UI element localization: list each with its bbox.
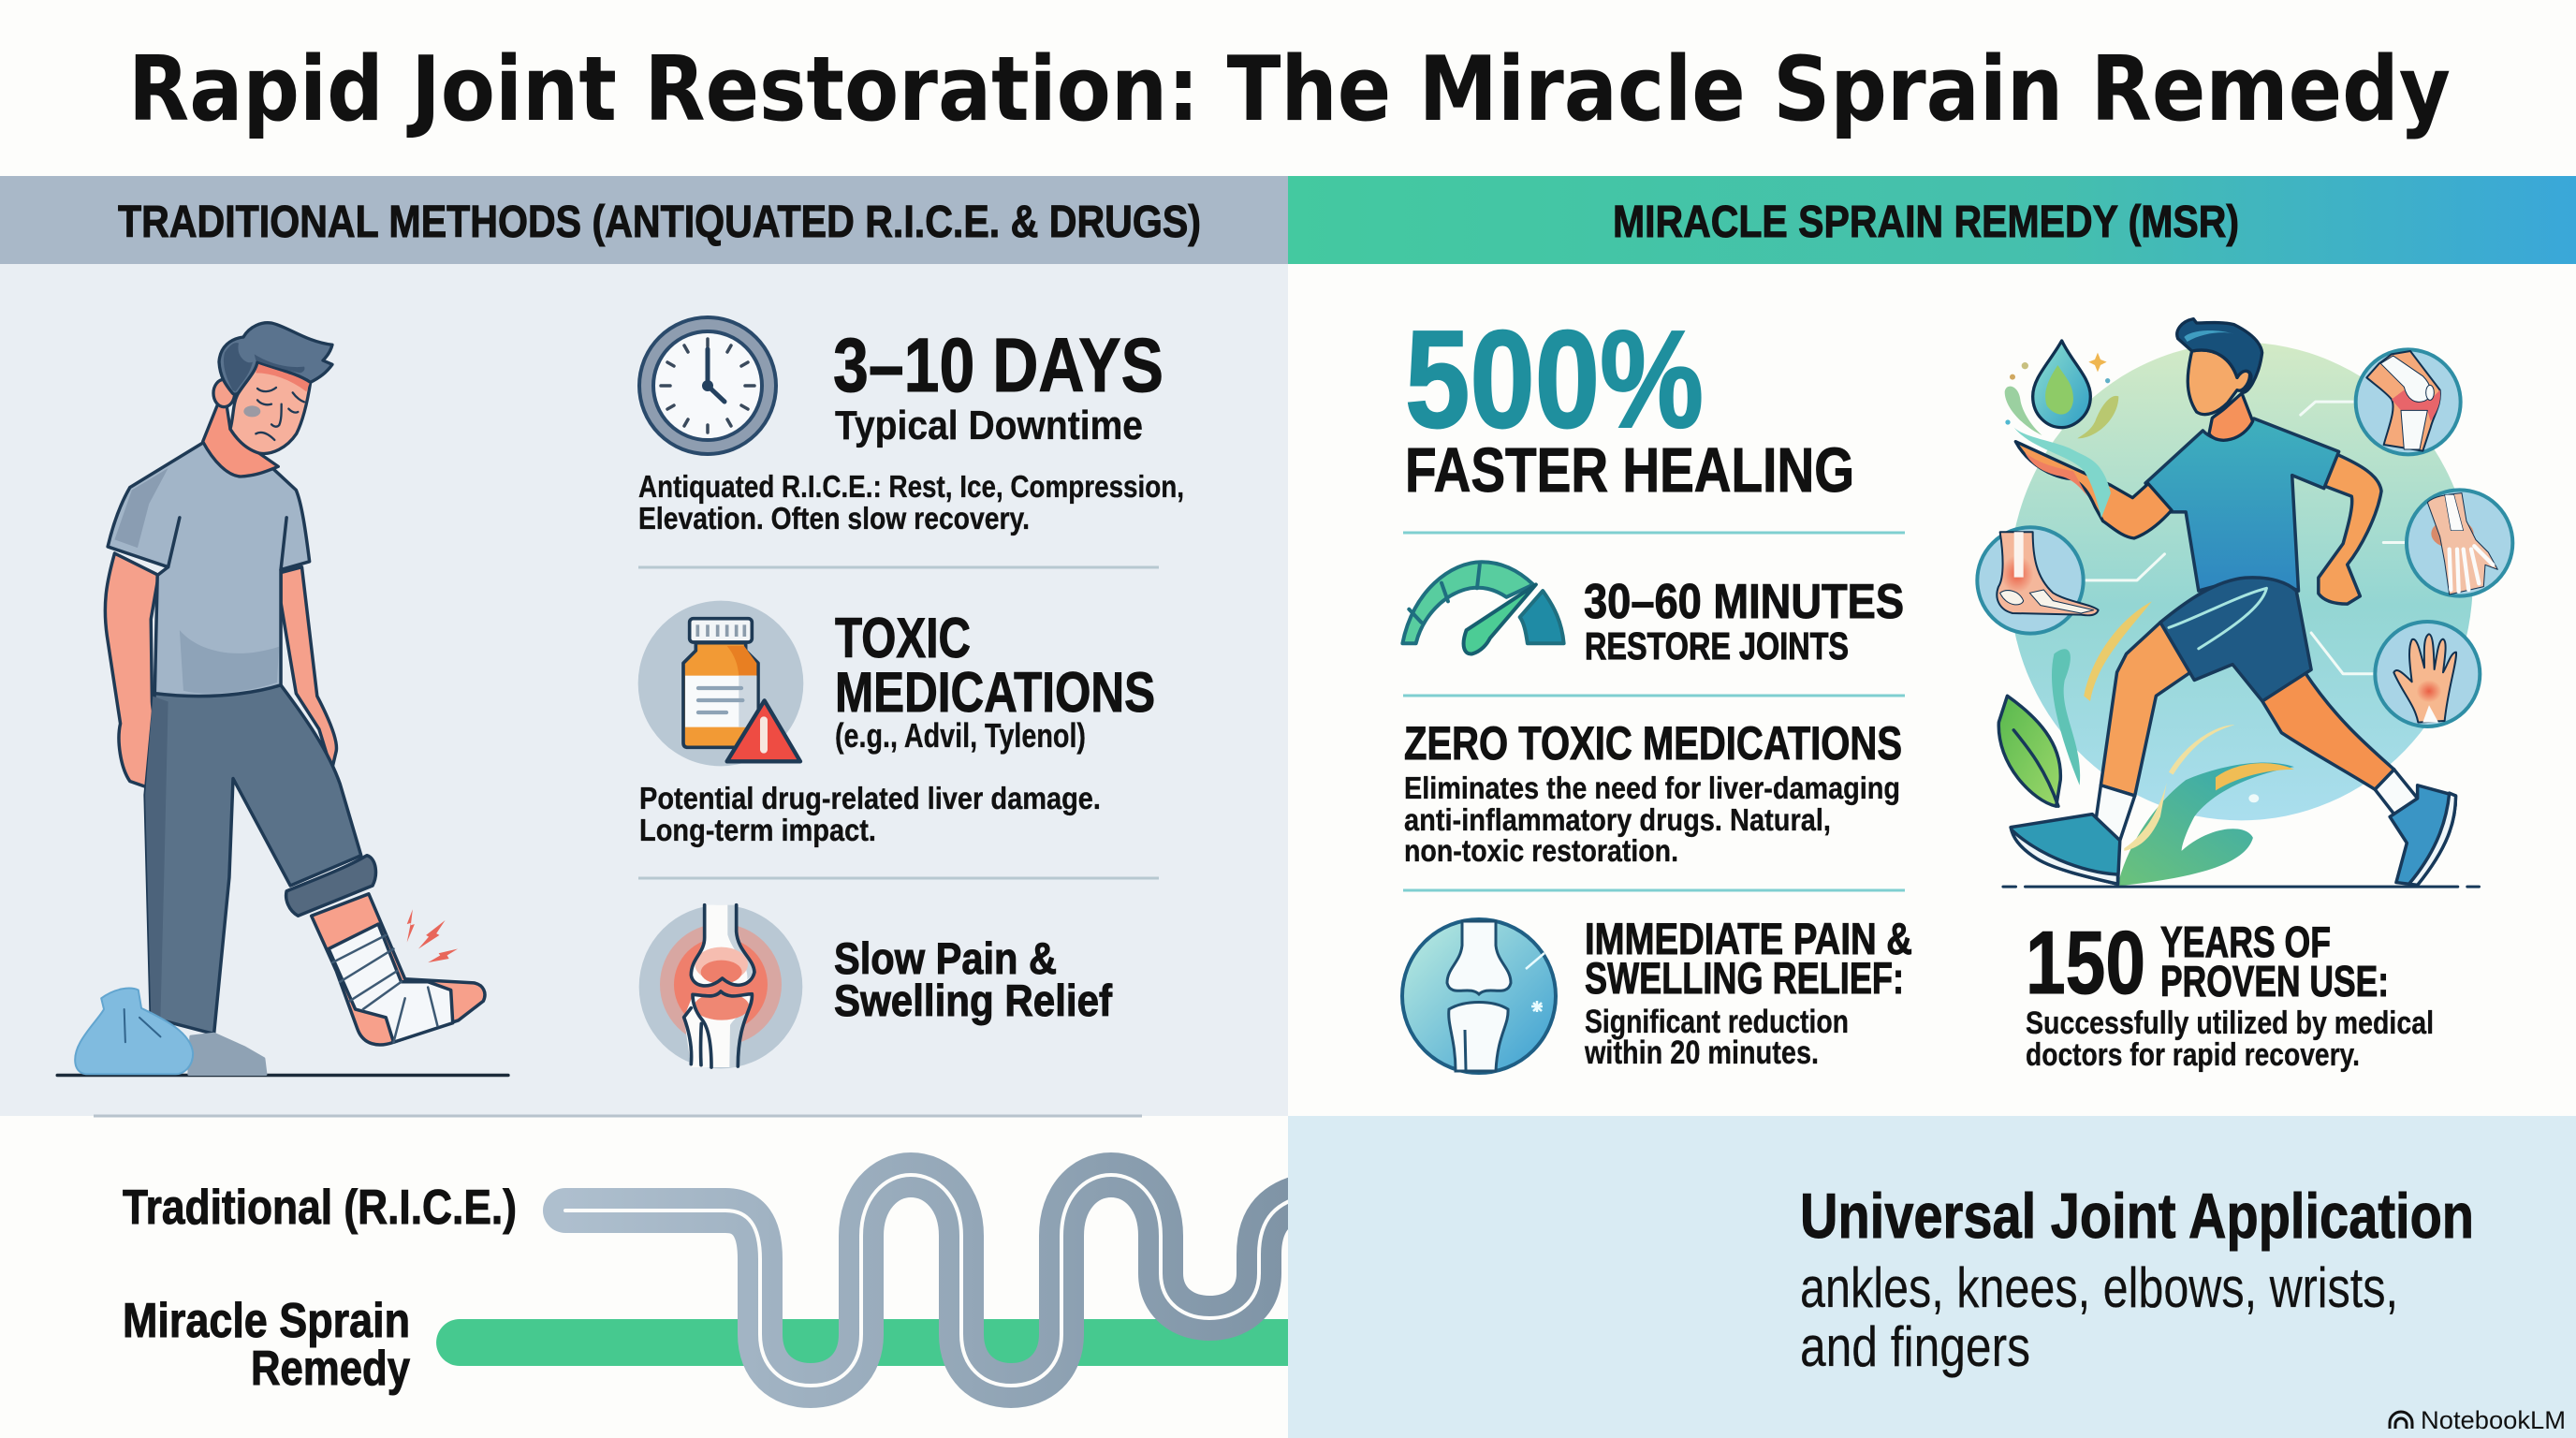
text block: slow pain relief xyxy=(834,933,1112,1025)
insets: knee, wrist and hand joints xyxy=(2356,349,2512,726)
text block: 150 years of proven use: doctors for rapid recovery. xyxy=(2026,1037,2360,1073)
text block: toxic medications: Potential drug-related liver damage. xyxy=(639,781,1101,815)
text block: 3-10 days: 3–10 DAYS xyxy=(833,323,1164,408)
text block: 150 years of proven use: Successfully utilized by medical xyxy=(2026,1005,2434,1041)
text block: zero toxic medications: Eliminates the need for liver-damaging xyxy=(1404,770,1900,805)
text block: immediate pain relief xyxy=(1584,914,1912,1071)
chart: recovery path comparison xyxy=(123,1175,1320,1396)
text block: 150 years of proven use: 150 xyxy=(2026,913,2145,1013)
text block: slow pain relief: Swelling Relief xyxy=(834,976,1112,1025)
icon: clock xyxy=(639,317,776,454)
text block: 150 years of proven use: YEARS OF xyxy=(2160,917,2331,966)
icon: medication bottle with warning xyxy=(638,601,803,766)
logo: NotebookLM: NotebookLM xyxy=(2421,1406,2566,1434)
text block: immediate pain relief: within 20 minutes. xyxy=(1584,1034,1819,1071)
illustration: injured man with bandaged ankle and ice bag xyxy=(57,323,508,1075)
text block: 3-10 days: Antiquated R.I.C.E.: Rest, Ice, Compression, xyxy=(638,469,1184,504)
panel: miracle sprain remedy xyxy=(1288,176,2576,1073)
text block: toxic medications: Long-term impact. xyxy=(639,813,876,847)
text block: toxic medications: MEDICATIONS xyxy=(835,661,1155,724)
icon: inflamed joint xyxy=(639,905,802,1068)
icon: speed gauge xyxy=(1402,562,1564,654)
inset: knee xyxy=(2356,349,2461,454)
icon: healed knee joint xyxy=(1402,919,1556,1073)
path: winding grey road xyxy=(543,1152,1288,1408)
label: miracle sprain remedy path: Miracle Sprain xyxy=(123,1294,410,1348)
panel: universal joint application: and fingers xyxy=(1800,1315,2030,1378)
text block: 150 years of proven use: PROVEN USE: xyxy=(2160,957,2389,1005)
bar: direct green path xyxy=(436,1319,1288,1366)
text block: immediate pain relief: IMMEDIATE PAIN & xyxy=(1585,914,1912,963)
text block: 30-60 minutes xyxy=(1584,575,1904,668)
text block: 30-60 minutes: 30–60 MINUTES xyxy=(1584,575,1904,629)
stat: 500% faster healing: 500% xyxy=(1405,302,1704,457)
illustration: runner with remedy drop and joint insets xyxy=(1977,319,2512,887)
inset: hand xyxy=(2375,622,2480,726)
panel: universal joint application: ankles, knees, elbows, wrists, xyxy=(1800,1256,2398,1319)
text block: toxic medications: (e.g., Advil, Tylenol) xyxy=(835,716,1086,755)
stat: 500% faster healing: FASTER HEALING xyxy=(1405,435,1854,506)
panel: traditional methods xyxy=(0,176,1288,1116)
text block: toxic medications: TOXIC xyxy=(835,607,971,669)
text block: immediate pain relief: SWELLING RELIEF: xyxy=(1585,953,1904,1003)
inset: ankle joint xyxy=(1977,527,2099,634)
text block: toxic medications xyxy=(639,607,1155,847)
traditional header xyxy=(0,176,1288,264)
text block: 3-10 days: Typical Downtime xyxy=(835,403,1143,448)
label: miracle sprain remedy path: Remedy xyxy=(251,1342,410,1396)
text block: slow pain relief: Slow Pain & xyxy=(834,933,1057,983)
man's head xyxy=(203,323,332,477)
text block: immediate pain relief: Significant reduction xyxy=(1585,1004,1849,1040)
inset: wrist xyxy=(2407,490,2512,596)
traditional header: TRADITIONAL METHODS (ANTIQUATED R.I.C.E. & DRUGS) xyxy=(118,198,1201,247)
stat: 500% faster healing xyxy=(1405,302,1854,506)
label: miracle sprain remedy path xyxy=(123,1294,410,1396)
label: traditional path: Traditional (R.I.C.E.) xyxy=(123,1181,517,1235)
remedy drop, hand and head xyxy=(2005,319,2262,538)
text block: 150 years of proven use xyxy=(2026,913,2434,1073)
text block: zero toxic medications xyxy=(1404,717,1902,868)
text block: zero toxic medications: ZERO TOXIC MEDICATIONS xyxy=(1404,717,1902,770)
text block: zero toxic medications: non-toxic restoration. xyxy=(1404,833,1678,868)
panel: universal joint application xyxy=(1288,1116,2576,1438)
text block: 30-60 minutes: RESTORE JOINTS xyxy=(1585,624,1849,668)
text block: 3-10 days: Elevation. Often slow recovery. xyxy=(638,501,1030,536)
msr header: MIRACLE SPRAIN REMEDY (MSR) xyxy=(1613,198,2239,247)
text block: 3-10 days xyxy=(638,323,1184,536)
text block: zero toxic medications: anti-inflammatory drugs. Natural, xyxy=(1404,802,1831,837)
msr header xyxy=(1288,176,2576,264)
